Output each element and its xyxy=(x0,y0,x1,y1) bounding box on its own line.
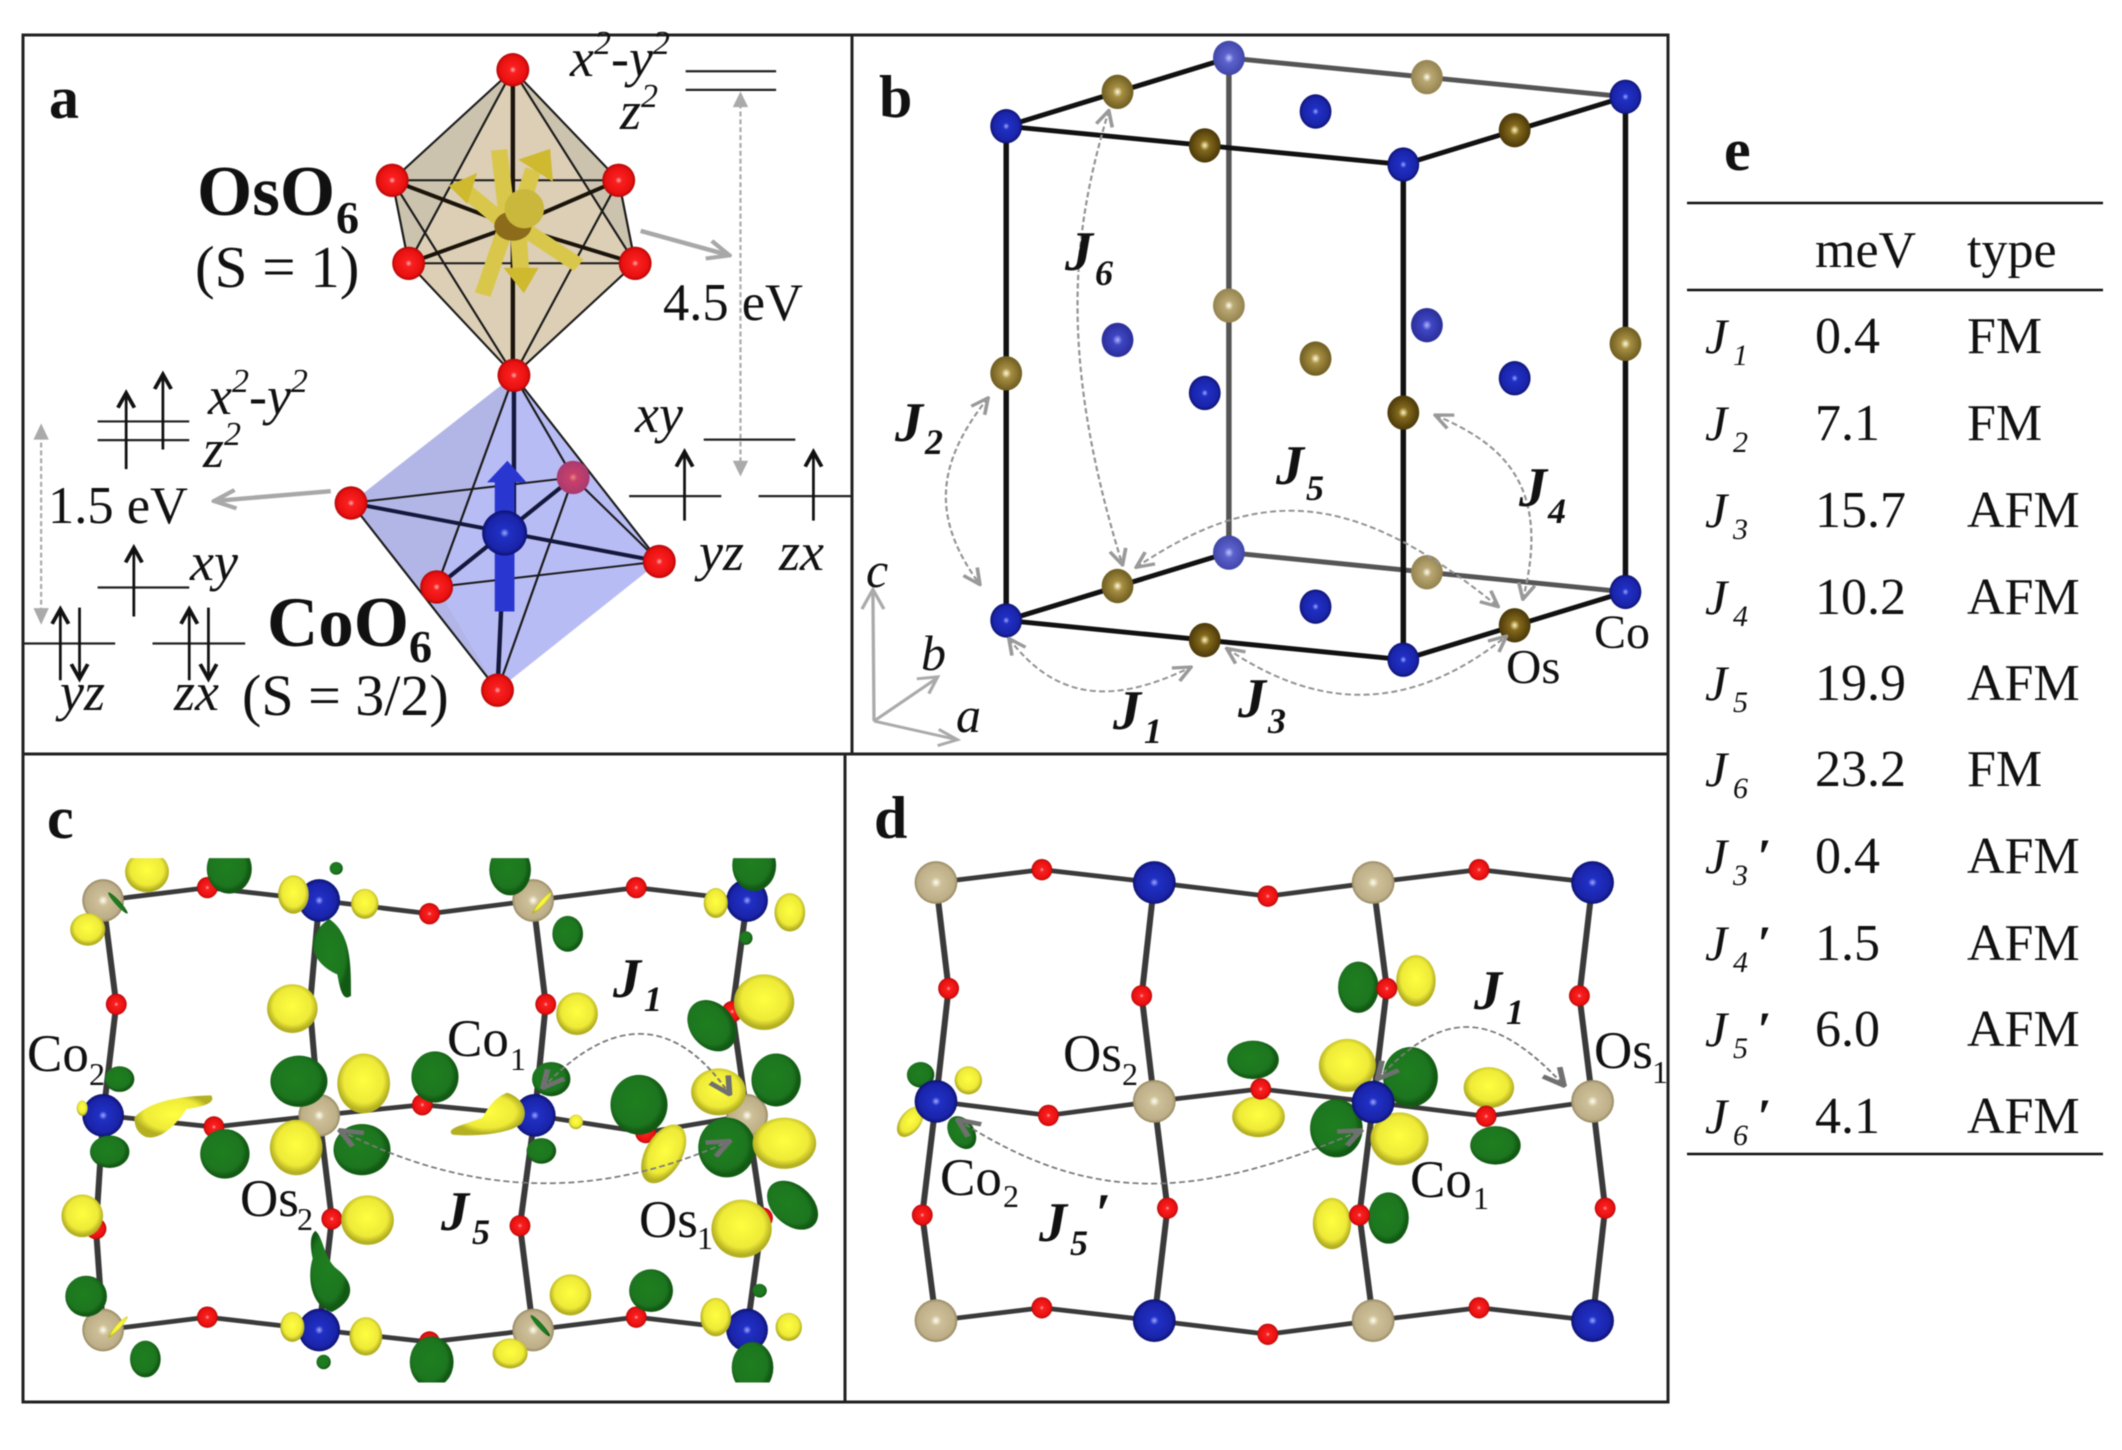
atom and coupling labels: 1 xyxy=(697,1220,713,1256)
orbital labels: z xyxy=(620,81,641,141)
table row J1: J xyxy=(1705,308,1727,364)
table row J6 prime: J xyxy=(1705,1088,1727,1144)
atom labels: Os xyxy=(1506,639,1560,694)
exchange path arrows xyxy=(340,1034,730,1183)
atom and coupling labels xyxy=(27,948,713,1256)
table row J4: 10.2 xyxy=(1815,569,1906,626)
orbital labels: 2 xyxy=(641,78,658,115)
atom and coupling labels: ′ xyxy=(1095,1183,1111,1245)
orbital labels: x xyxy=(208,366,232,426)
panel label b: b xyxy=(879,64,912,130)
exchange path arrows xyxy=(946,111,1531,695)
OsO6 label: 6 xyxy=(336,192,359,243)
table row J3 prime: 3 xyxy=(1732,859,1748,892)
atom and coupling labels: 1 xyxy=(510,1041,526,1077)
coupling labels xyxy=(894,221,1566,751)
atom and coupling labels: J xyxy=(1474,960,1502,1022)
coupling labels: 2 xyxy=(924,422,943,462)
OsO6 spin label: (S = 1) xyxy=(195,234,359,300)
atom labels xyxy=(1506,606,1650,694)
table row J6: J xyxy=(1705,741,1727,797)
orbital labels: 2 xyxy=(653,25,670,62)
orbital labels: 2 xyxy=(232,363,249,400)
atom and coupling labels: Os xyxy=(1063,1025,1122,1083)
atom and coupling labels: 1 xyxy=(1473,1180,1489,1216)
splitting 1.5 eV: 1.5 eV xyxy=(48,477,188,535)
table row J5: AFM xyxy=(1967,655,2080,712)
table row J3 prime: AFM xyxy=(1967,828,2080,885)
axis labels: b xyxy=(921,625,946,681)
green lobes xyxy=(65,840,829,1393)
table row J2: J xyxy=(1705,395,1727,451)
coupling labels: J xyxy=(1238,668,1266,730)
table row J3: AFM xyxy=(1967,482,2080,539)
table row J4: 4 xyxy=(1733,600,1748,633)
coupling labels: J xyxy=(895,392,923,454)
exchange path arrows xyxy=(958,1027,1564,1184)
table row J5 prime xyxy=(1705,1001,2080,1065)
lattice and orbital lobes xyxy=(61,840,829,1393)
table row J6 prime xyxy=(1705,1088,2080,1152)
table row J3 prime: J xyxy=(1705,828,1727,884)
table header: meV xyxy=(1815,222,1916,279)
table row J5 prime: 6.0 xyxy=(1815,1001,1880,1058)
table row J3 xyxy=(1705,482,2080,546)
table row J4 xyxy=(1705,569,2080,633)
Os atoms xyxy=(990,60,1641,657)
atom and coupling labels: Co xyxy=(940,1149,1002,1207)
OsO6 octahedron with spin arrows xyxy=(376,53,652,375)
atom and coupling labels: 5 xyxy=(1070,1223,1088,1263)
level scheme and arrows xyxy=(23,71,851,680)
orbital labels: x xyxy=(570,28,594,88)
table row J6 xyxy=(1705,741,2042,805)
panel: d, spin density xyxy=(874,785,1668,1345)
coupling labels: 6 xyxy=(1095,253,1113,293)
panel label e: e xyxy=(1724,117,1751,183)
panel frame xyxy=(23,35,1668,1402)
axis labels xyxy=(866,542,981,743)
lattice and orbital lobes xyxy=(891,859,1616,1345)
table row J4: J xyxy=(1705,569,1727,625)
coupling labels: J xyxy=(1065,221,1093,283)
table row J1: 1 xyxy=(1733,339,1748,372)
yellow lobes xyxy=(61,851,816,1368)
panel: c, spin density xyxy=(27,785,829,1393)
atom and coupling labels: 1 xyxy=(1652,1054,1668,1090)
atom and coupling labels: J xyxy=(441,1181,469,1243)
atom and coupling labels: J xyxy=(613,948,641,1010)
table row J4 prime: J xyxy=(1705,915,1727,971)
panel: a, octahedra and energy levels xyxy=(23,25,851,728)
table row J2: FM xyxy=(1967,395,2042,452)
panel: b, crystal cell xyxy=(862,41,1650,751)
table row J5: 19.9 xyxy=(1815,655,1906,712)
table row J6: 23.2 xyxy=(1815,741,1906,798)
atoms xyxy=(82,877,773,1353)
orbital labels xyxy=(55,25,824,722)
table row J3: 15.7 xyxy=(1815,482,1906,539)
spin arrows xyxy=(463,150,579,295)
coupling labels: 5 xyxy=(1306,468,1324,508)
panel label d: d xyxy=(874,785,907,851)
table row J6 prime: AFM xyxy=(1967,1088,2080,1145)
table header xyxy=(1815,222,2057,279)
atom and coupling labels xyxy=(940,960,1668,1263)
table row J1 xyxy=(1705,308,2042,372)
atom and coupling labels: Co xyxy=(447,1010,509,1068)
atom and coupling labels: 1 xyxy=(644,979,662,1019)
orbital labels: z xyxy=(203,419,224,479)
atom and coupling labels: Co xyxy=(1410,1151,1472,1209)
atom and coupling labels: J xyxy=(1039,1192,1067,1254)
atom and coupling labels: 2 xyxy=(89,1056,105,1092)
CoO6 label: 6 xyxy=(409,621,432,672)
OsO6 label: OsO xyxy=(197,153,335,231)
table row J5 xyxy=(1705,655,2080,719)
table row J4 prime xyxy=(1705,915,2080,979)
table row J5 prime: 5 xyxy=(1733,1032,1748,1065)
table row J6: FM xyxy=(1967,741,2042,798)
table row J6 prime: ′ xyxy=(1757,1088,1771,1144)
splitting 4.5 eV: 4.5 eV xyxy=(663,274,803,332)
table row J5 prime: J xyxy=(1705,1001,1727,1057)
green lobes xyxy=(907,962,1521,1244)
axis labels: c xyxy=(866,542,888,598)
orbital labels: zx xyxy=(173,662,219,722)
table row J5: J xyxy=(1705,655,1727,711)
coupling labels: J xyxy=(1113,680,1141,742)
coupling labels: 1 xyxy=(1144,711,1162,751)
table row J6: 6 xyxy=(1733,772,1748,805)
crystal axes xyxy=(862,589,957,746)
yellow lobes xyxy=(891,955,1514,1249)
table row J3 prime: ′ xyxy=(1757,828,1771,884)
panel label c: c xyxy=(47,785,74,851)
table row J3 prime: 0.4 xyxy=(1815,828,1880,885)
bonds xyxy=(96,888,762,1342)
orbital labels: -y xyxy=(249,366,291,426)
coupling labels: 3 xyxy=(1267,701,1286,741)
table row J2: 7.1 xyxy=(1815,395,1880,452)
atoms xyxy=(912,859,1616,1345)
atom and coupling labels: Os xyxy=(1594,1022,1653,1080)
atom and coupling labels: 2 xyxy=(1003,1178,1019,1214)
orbital labels: zx xyxy=(778,522,824,582)
table row J4 prime: 1.5 xyxy=(1815,915,1880,972)
coupling labels: J xyxy=(1276,435,1304,497)
table row J6 prime: 6 xyxy=(1733,1119,1748,1152)
table rules xyxy=(1687,203,2103,1154)
panel: e, coupling table xyxy=(1687,117,2103,1154)
unit cell xyxy=(862,41,1641,746)
table row J4 prime: 4 xyxy=(1733,946,1748,979)
orbital labels: 2 xyxy=(594,25,611,62)
orbital labels: 2 xyxy=(224,416,241,453)
orbital labels: yz xyxy=(55,662,105,722)
table row J5 prime: ′ xyxy=(1757,1001,1771,1057)
Co atoms xyxy=(990,41,1641,677)
atom and coupling labels: 5 xyxy=(472,1212,490,1252)
orbital labels: xy xyxy=(189,532,238,592)
table row J4 prime: AFM xyxy=(1967,915,2080,972)
table row J2: 2 xyxy=(1733,426,1748,459)
orbital labels: 2 xyxy=(291,363,308,400)
atom and coupling labels: Os xyxy=(639,1191,698,1249)
table row J1: FM xyxy=(1967,308,2042,365)
table row J5 prime: AFM xyxy=(1967,1001,2080,1058)
coupling labels: 4 xyxy=(1547,491,1566,531)
atom and coupling labels: 1 xyxy=(1506,992,1524,1032)
table row J4: AFM xyxy=(1967,569,2080,626)
atom and coupling labels: Os xyxy=(240,1170,299,1228)
CoO6 octahedron with spin arrow xyxy=(335,359,676,707)
atom labels: Co xyxy=(1594,606,1650,659)
table row J3: J xyxy=(1705,482,1727,538)
table row J5: 5 xyxy=(1733,686,1748,719)
bonds xyxy=(922,870,1605,1334)
atom and coupling labels: 2 xyxy=(1122,1056,1138,1092)
coupling labels: J xyxy=(1519,457,1547,519)
CoO6 label: CoO xyxy=(267,584,409,662)
table row J3 prime xyxy=(1705,828,2080,892)
panel label a: a xyxy=(49,65,79,131)
table row J4 prime: ′ xyxy=(1757,915,1771,971)
table header: type xyxy=(1967,222,2057,279)
table row J2 xyxy=(1705,395,2042,459)
orbital labels: yz xyxy=(694,522,744,582)
atom and coupling labels: Co xyxy=(27,1025,89,1083)
CoO6 spin label: (S = 3/2) xyxy=(242,663,449,728)
table row J6 prime: 4.1 xyxy=(1815,1088,1880,1145)
orbital labels: xy xyxy=(634,384,683,444)
table row J3: 3 xyxy=(1732,513,1748,546)
table row J1: 0.4 xyxy=(1815,308,1880,365)
orbital labels: -y xyxy=(611,28,653,88)
oxygen atoms xyxy=(496,53,529,86)
axis labels: a xyxy=(956,687,981,743)
atom and coupling labels: 2 xyxy=(297,1201,313,1237)
